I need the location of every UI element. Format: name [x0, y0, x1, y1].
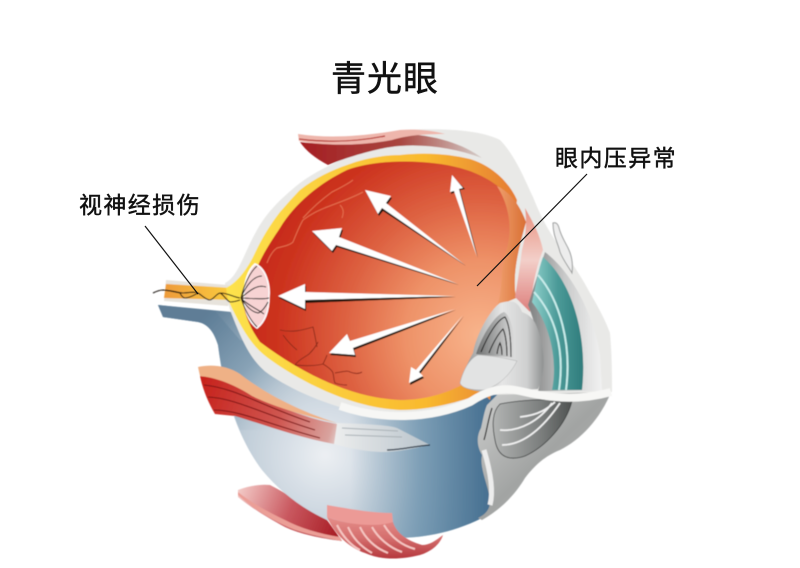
arrow: left [278, 284, 455, 309]
optic nerve [164, 280, 232, 306]
pink ciliary [515, 208, 543, 312]
leader line: pressure [477, 174, 587, 286]
retinal vessels upper [267, 180, 363, 263]
iris ear fold [493, 400, 572, 458]
title: 青光眼 [331, 60, 439, 99]
eyeball illustration [153, 129, 612, 559]
label: optic nerve damage: 视神经损伤 [79, 192, 201, 218]
optic disc [241, 264, 269, 328]
cornea grey layer [528, 252, 602, 391]
floating grey fragment [553, 223, 572, 273]
white sclera line [340, 389, 611, 416]
muscle: front lower [327, 505, 443, 559]
arrow: lower left [329, 309, 455, 355]
label: abnormal intraocular pressure: 眼内压异常 [555, 145, 677, 171]
sphere: lower blue sclera [158, 305, 500, 538]
lens and ciliary body [460, 301, 544, 392]
muscle: top [298, 130, 482, 165]
yellow retina rim [226, 154, 517, 410]
muscle: back lower [238, 485, 342, 541]
optic nerve fibres [153, 290, 240, 302]
leader line: optic nerve [145, 226, 198, 294]
arrow: down [409, 315, 463, 383]
arrow: up right [450, 175, 477, 257]
retinal vessels lower [280, 327, 362, 385]
cornea teal layers [532, 257, 583, 390]
arrow: upper left [312, 228, 458, 284]
pressure arrow shadows [279, 177, 478, 385]
arrow: up left [365, 190, 465, 265]
muscle: left [198, 366, 430, 452]
lower right grey body [478, 390, 612, 520]
outer sclera shell [225, 129, 612, 418]
orange band inside iris edge [497, 186, 526, 306]
eye chamber [243, 162, 526, 400]
